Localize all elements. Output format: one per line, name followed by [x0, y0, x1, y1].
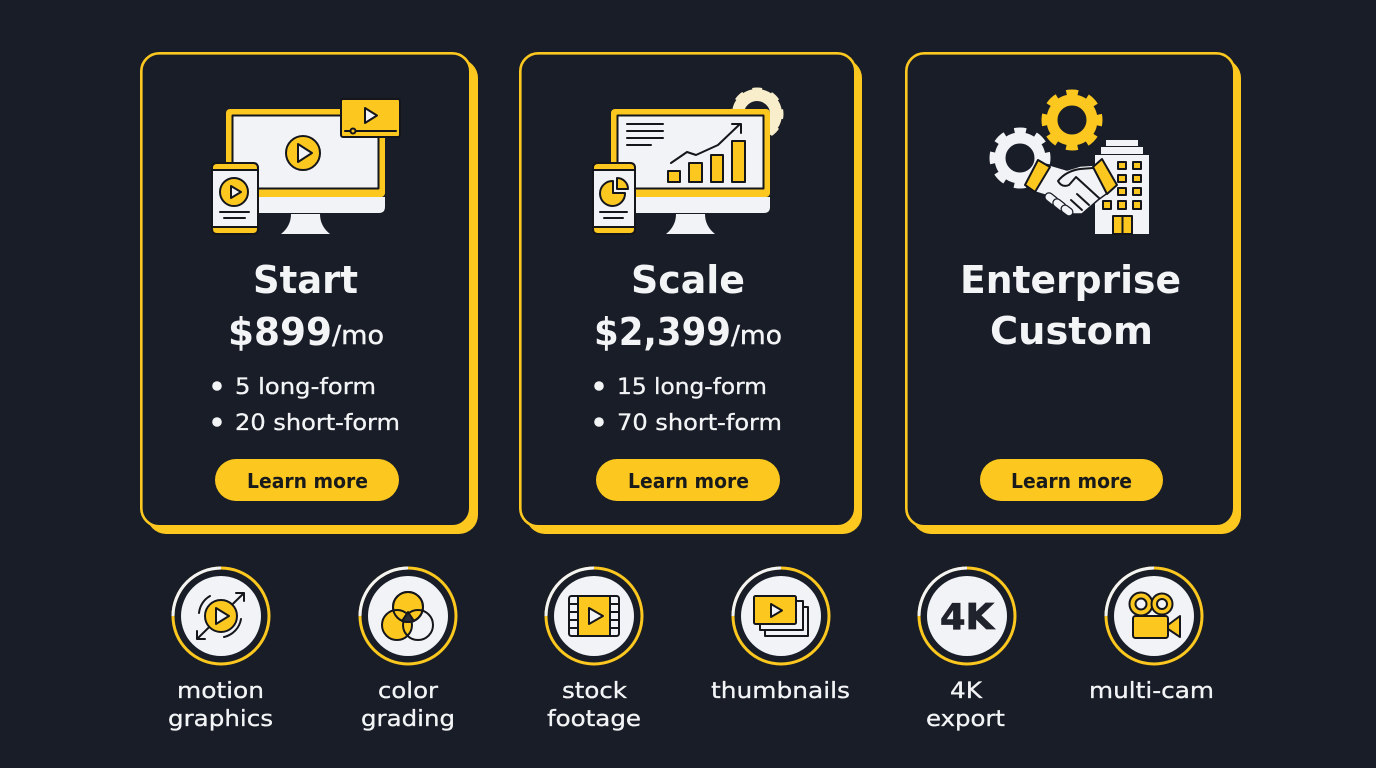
- button: Learn more: Learn more: [247, 469, 368, 493]
- feature list: Scale: [594, 375, 782, 436]
- label: motion graphics: [168, 679, 273, 732]
- icon: gears, handshake and office building: [992, 92, 1149, 234]
- price: $899/mo: [228, 310, 384, 354]
- label: stock footage: stock: [562, 679, 627, 704]
- icon: stacked thumbnails: [733, 568, 829, 664]
- heading: Start: Start: [253, 258, 358, 302]
- price: Custom: Custom: [990, 309, 1153, 353]
- price: $899/mo: /mo: [332, 321, 384, 351]
- feature list: Start: 20 short-form: [235, 411, 400, 436]
- feature: multi-cam: [1089, 568, 1214, 704]
- label: stock footage: footage: [547, 707, 641, 732]
- label: motion graphics: graphics: [168, 707, 273, 732]
- white gear: [992, 130, 1048, 186]
- button: Learn more: Learn more: [1011, 469, 1132, 493]
- feature: color grading: [360, 568, 456, 732]
- icon: movie camera: [1106, 568, 1202, 664]
- panel: Enterprise plan: [906, 53, 1241, 534]
- card frame: Enterprise: [906, 53, 1241, 534]
- heading: Scale: Scale: [631, 258, 745, 302]
- feature list: Start: 5 long-form: [235, 375, 376, 400]
- icon: monitor with growth chart, gear and phone: [593, 90, 782, 234]
- feature: motion graphics: [168, 568, 273, 732]
- button: Learn more: Learn more: [628, 469, 749, 493]
- icon: monitor with video player and phone: [212, 99, 400, 234]
- label: 4K export: export: [926, 707, 1005, 732]
- label: stock footage: [547, 679, 641, 732]
- label: motion graphics: motion: [177, 679, 264, 704]
- panel: Start plan: [141, 53, 478, 534]
- label: multi-cam: multi-cam: [1089, 679, 1214, 704]
- feature: stock footage: [546, 568, 642, 732]
- label: color grading: color: [378, 679, 439, 704]
- label: thumbnails: thumbnails: [711, 679, 850, 704]
- feature list: Scale: 70 short-form: [617, 411, 782, 436]
- label: 4K export: [926, 679, 1005, 732]
- icon: 4K badge: [919, 568, 1015, 664]
- icon: film strip: [546, 568, 642, 664]
- icon: 4K badge: 4K: [940, 597, 995, 638]
- panel: Scale plan: [520, 53, 862, 534]
- button: Learn more: [215, 459, 399, 501]
- label: 4K export: 4K: [950, 679, 983, 704]
- price: $899/mo: $899: [228, 310, 332, 354]
- feature list: Start: [212, 375, 400, 436]
- heading: Enterprise: Enterprise: [960, 258, 1181, 302]
- building: [1095, 140, 1149, 234]
- card frame: Scale: [520, 53, 862, 534]
- price: $2,399/mo: /mo: [731, 321, 782, 351]
- icon: overlapping color circles: [360, 568, 456, 664]
- feature: 4K export: [919, 568, 1015, 732]
- label: color grading: [361, 679, 455, 732]
- button: Learn more: [980, 459, 1163, 501]
- feature: thumbnails: [711, 568, 850, 704]
- feature list: Scale: 15 long-form: [617, 375, 767, 400]
- yellow gear: [1044, 92, 1100, 148]
- button: Learn more: [596, 459, 780, 501]
- handshake: [1025, 159, 1117, 214]
- icon: motion graphics: [173, 568, 269, 664]
- price: $2,399/mo: $2,399: [594, 310, 731, 354]
- label: color grading: grading: [361, 707, 455, 732]
- card frame: Start: [141, 53, 478, 534]
